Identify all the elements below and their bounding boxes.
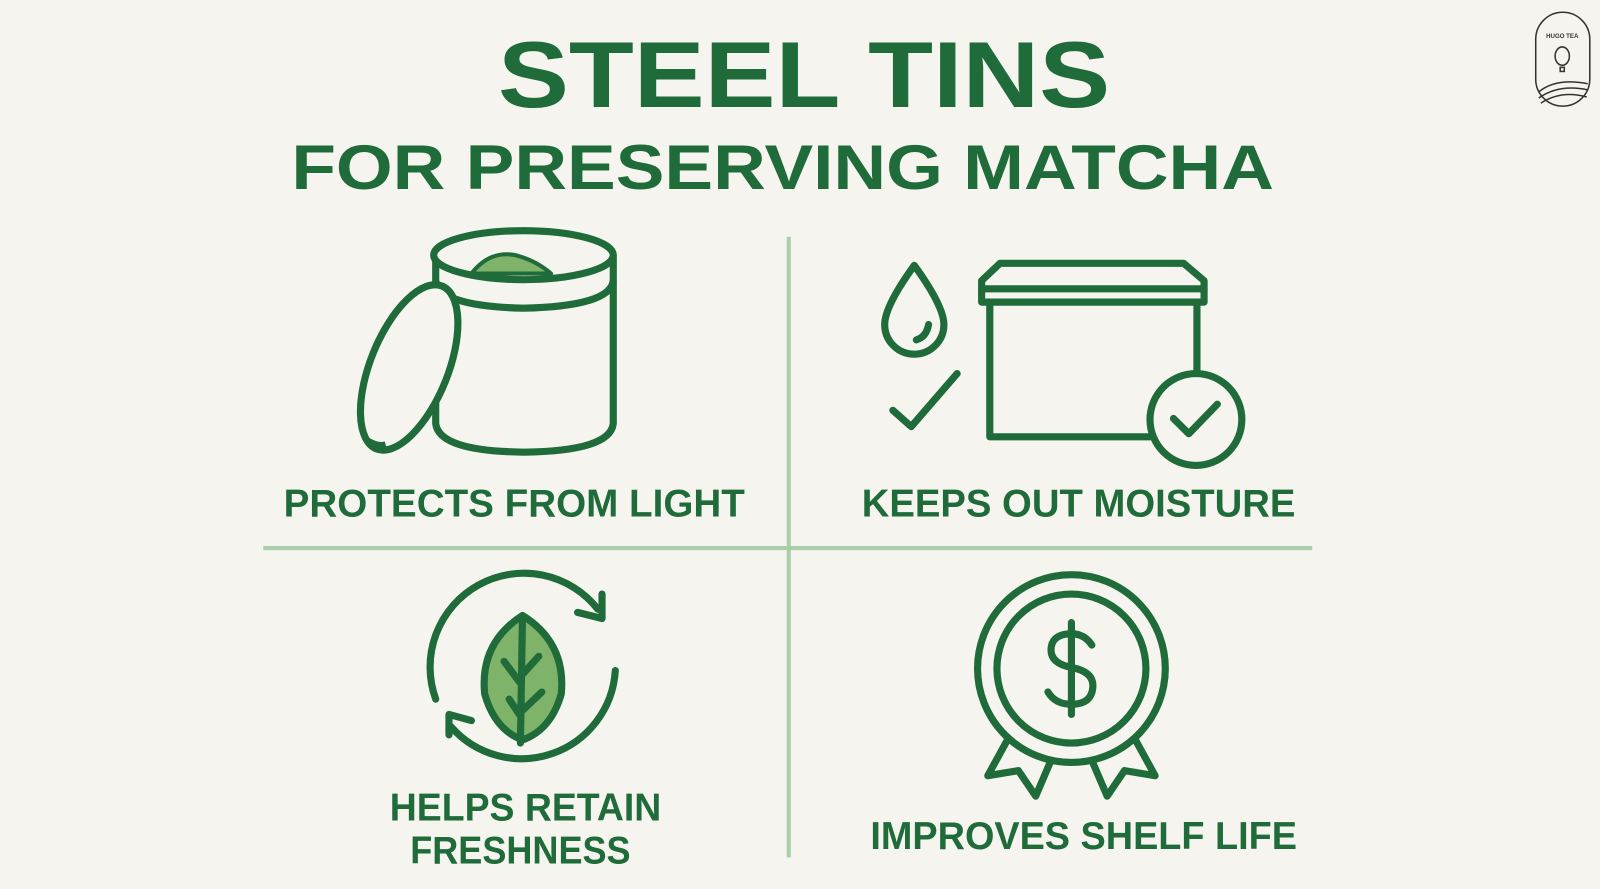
panel: helps retain freshness xyxy=(390,573,661,872)
label: KEEPS OUT MOISTURE xyxy=(862,482,1295,525)
label: FRESHNESS xyxy=(410,829,631,872)
label: PROTECTS FROM LIGHT xyxy=(284,482,745,525)
icon: open tin xyxy=(340,231,613,463)
logo xyxy=(1536,12,1590,106)
panel: keeps out moisture xyxy=(862,263,1295,525)
title xyxy=(291,22,1274,203)
logo: HUGO TEA xyxy=(1546,33,1579,40)
icon: leaf with cycle arrows xyxy=(430,573,615,759)
title: STEEL TINS xyxy=(498,22,1110,127)
label: HELPS RETAIN xyxy=(390,787,661,830)
panel: improves shelf life xyxy=(870,575,1297,858)
label: IMPROVES SHELF LIFE xyxy=(870,815,1297,858)
panel: protects from light xyxy=(284,231,745,525)
title: FOR PRESERVING MATCHA xyxy=(291,133,1274,203)
label xyxy=(390,787,661,872)
dividers xyxy=(263,237,1312,857)
icon: drop, check, box xyxy=(885,263,1242,465)
icon: coin badge xyxy=(978,575,1165,796)
